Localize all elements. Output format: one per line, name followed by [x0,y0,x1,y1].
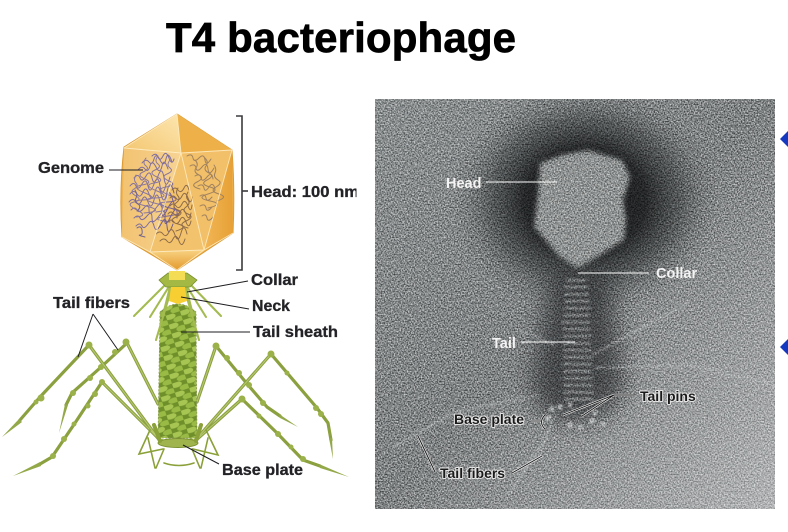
tail fibers faint [392,302,775,495]
micrograph labels, dark with halo: Tail pins [640,388,696,404]
micrograph labels, dark with halo [440,388,696,481]
dark halo around head [458,99,712,302]
micrograph labels, dark with halo: Tail fibers [440,465,505,481]
leader lines [78,170,250,464]
tail stripes [562,279,594,400]
genome coil [129,153,224,245]
neck [169,287,187,304]
diagram labels: Collar [251,272,298,289]
film grain [375,99,775,509]
bullet: blue diamond lower [780,339,788,355]
base plate [139,425,218,468]
panel: electron micrograph [375,85,775,509]
diagram labels: Head: 100 nm [251,184,359,201]
collar and whiskers [134,271,221,340]
diagram labels: Neck [252,298,290,315]
micrograph labels, white: Collar [656,266,697,282]
bullet: blue diamond upper [780,131,788,147]
base plate specks [545,402,606,430]
diagram labels: Genome [38,160,104,177]
head capsid [121,114,234,270]
tail sheath [158,304,197,438]
diagram labels: Tail sheath [253,324,338,341]
diagram labels [38,160,359,479]
head size bracket [236,116,248,270]
dark shadow around tail [530,275,625,420]
title: T4 bacteriophage [166,14,516,61]
diagram labels: Tail fibers [53,295,130,312]
fiber beads [34,338,324,462]
micrograph labels, white [446,176,697,352]
fiber tips [2,404,349,477]
micrograph labels, white: Tail [492,336,516,352]
micrograph labels, white: Head [446,176,481,192]
head blob [534,150,630,268]
micrograph leader lines, white [486,182,649,342]
micrograph leader lines, outlined [418,395,633,473]
diagram labels: Base plate [222,462,303,479]
micrograph labels, dark with halo: Base plate [454,411,524,427]
panel: labelled diagram of T4 phage [2,114,359,479]
tail fibers [20,343,331,466]
